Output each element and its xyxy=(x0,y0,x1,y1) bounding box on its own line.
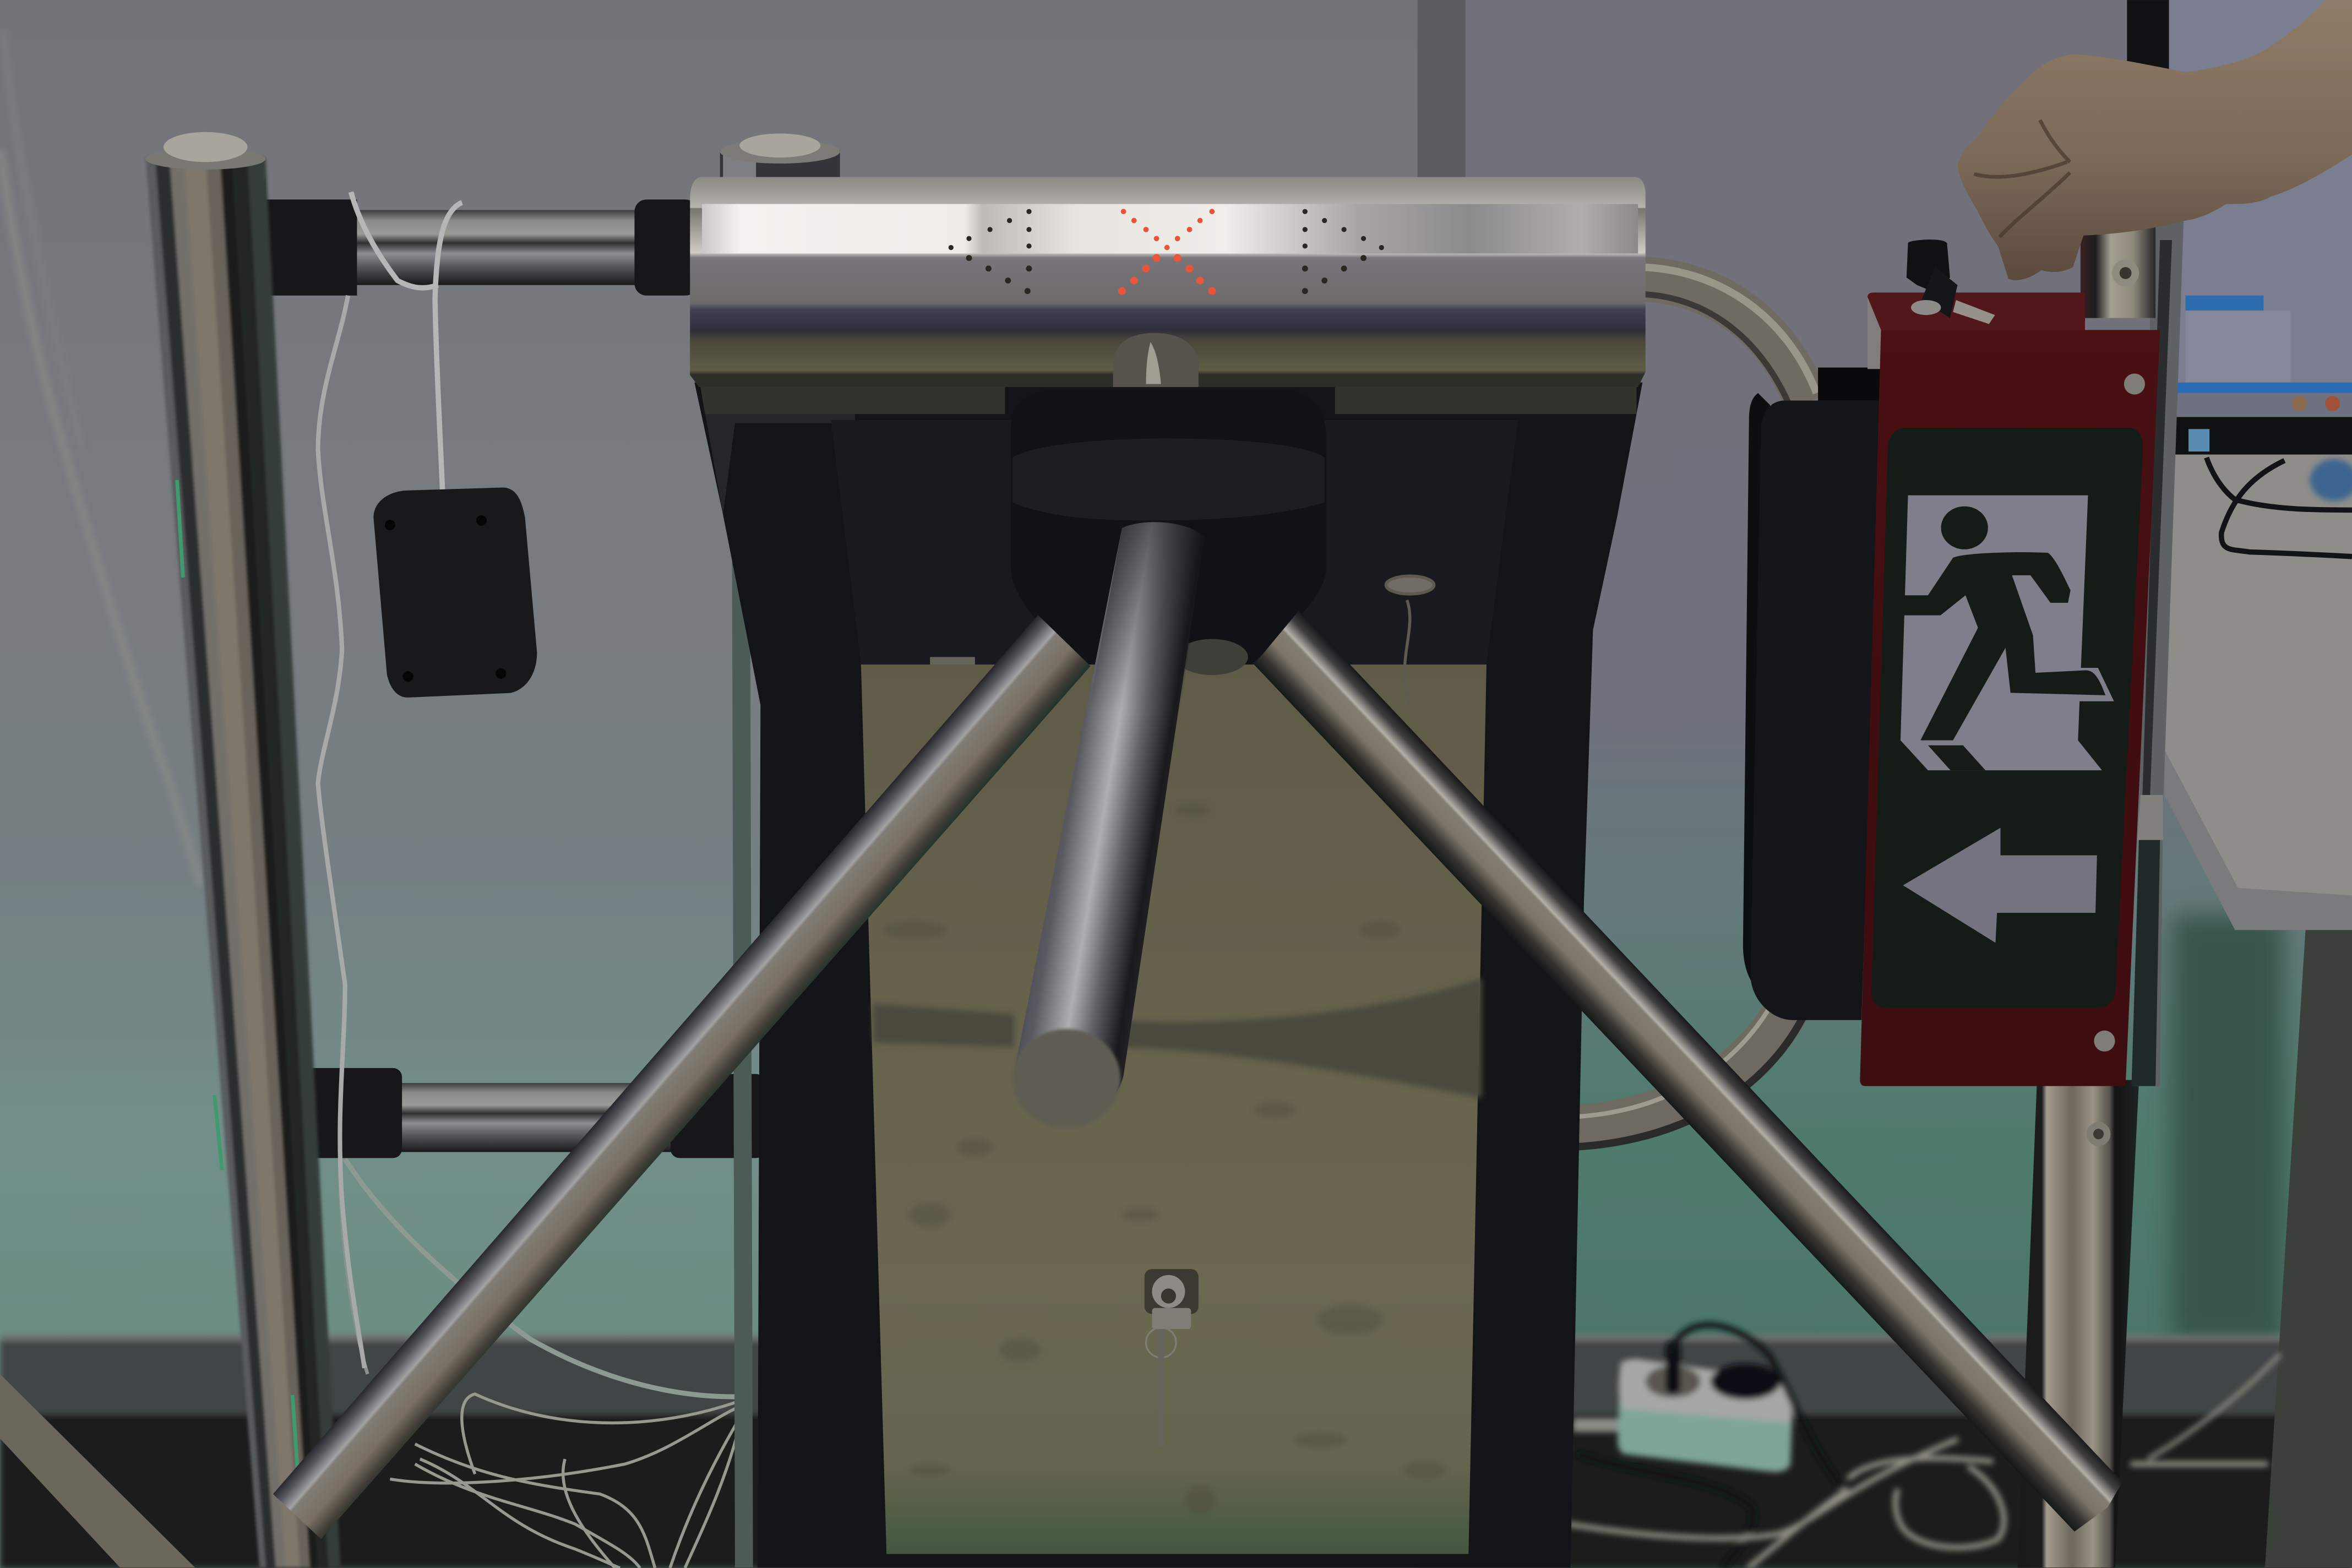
white table with cables xyxy=(2164,455,2352,1567)
white cables and reader xyxy=(318,192,537,1368)
thin chrome rod beside pedestal xyxy=(732,555,753,1567)
front xyxy=(1860,330,2160,1086)
back post and stopper xyxy=(720,134,840,195)
black collars xyxy=(244,177,698,296)
right post below exit box xyxy=(2017,1080,2139,1567)
post cap xyxy=(145,149,265,170)
monitor at right xyxy=(2127,0,2352,455)
turnstile arm: right xyxy=(1254,611,2122,1532)
left front post with stripes xyxy=(145,132,340,1567)
turnstile head chrome housing xyxy=(690,177,1646,387)
red emergency exit box xyxy=(1860,239,2160,1086)
curved chrome pipe, lower xyxy=(1553,1002,1803,1147)
key lock on mirror xyxy=(1145,1269,1199,1446)
floor speckle xyxy=(882,804,1446,1515)
turnstile arm: left xyxy=(273,615,1091,1539)
chrome rod right of exit box xyxy=(2133,210,2184,1086)
chrome stub above exit box xyxy=(2081,225,2155,318)
curved chrome pipe, upper xyxy=(1635,267,1816,402)
turnstile arm: centre xyxy=(1012,522,1205,1128)
mirror panel xyxy=(861,665,1487,1554)
black rear plate of exit unit xyxy=(1743,368,1884,1020)
white left arrow xyxy=(1903,828,2097,943)
green exit sign xyxy=(1871,428,2143,1008)
power strip and floor cables, right xyxy=(1568,1325,2280,1568)
LED red cross xyxy=(1118,209,1216,295)
baseboard and floor xyxy=(0,1335,2352,1568)
cash-box key at right of hub xyxy=(1386,576,1434,705)
foot outline xyxy=(2076,668,2114,701)
dark reflection band xyxy=(873,978,1482,1098)
table leg xyxy=(2265,930,2352,1567)
lid xyxy=(1868,292,2085,330)
LED arrow right xyxy=(1302,209,1384,294)
running figure xyxy=(1898,507,2105,770)
rotor hub xyxy=(1011,390,1326,675)
white door xyxy=(1901,496,2102,770)
black reader device xyxy=(373,488,537,698)
neck xyxy=(1113,333,1199,387)
shadow under table xyxy=(2172,915,2283,1342)
upper horizontal guard bar xyxy=(244,177,698,296)
hand turning key xyxy=(1957,0,2352,280)
left wall cables xyxy=(0,30,201,885)
key on top xyxy=(1907,239,1995,324)
screws xyxy=(2094,373,2145,1052)
lower horizontal guard bar xyxy=(300,1068,765,1158)
LED arrow left xyxy=(949,209,1032,294)
floor cables, left bundle xyxy=(340,1159,745,1568)
bottom-left arm fragment xyxy=(0,1374,195,1567)
turnstile pedestal xyxy=(694,383,1642,1567)
